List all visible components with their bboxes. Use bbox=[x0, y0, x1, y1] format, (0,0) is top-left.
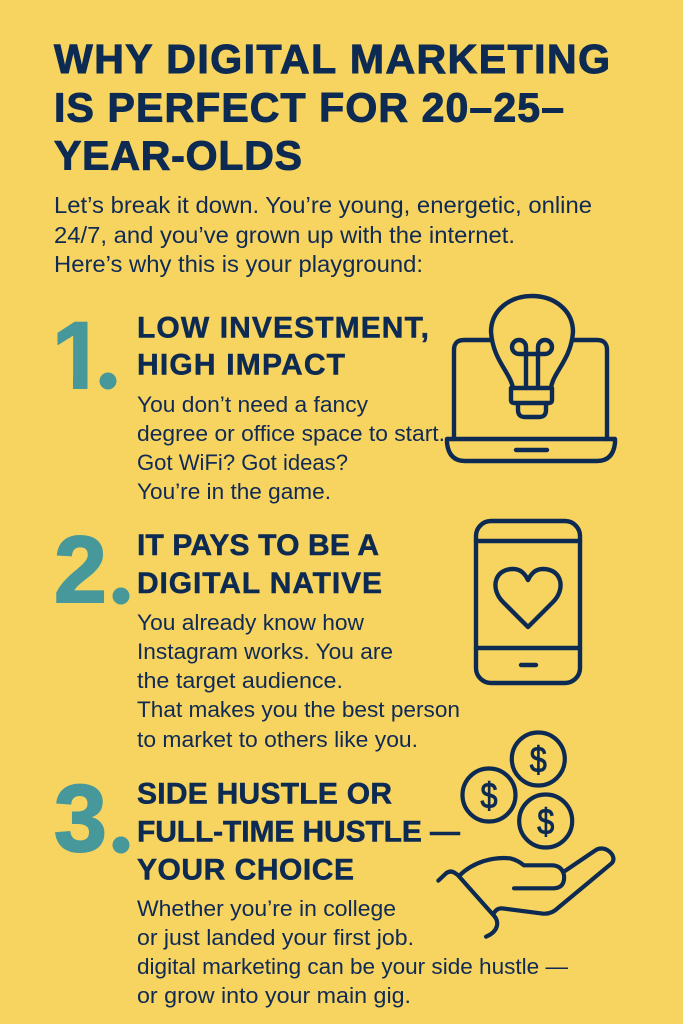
icon: hand with dollar coins: $ bbox=[530, 739, 547, 780]
intro text: 24/7, and you’ve grown up with the internet. bbox=[54, 222, 515, 248]
section 2 heading bbox=[137, 529, 382, 600]
section 3 body: Whether you’re in college bbox=[137, 896, 396, 921]
section 2 heading: DIGITAL NATIVE bbox=[137, 567, 382, 600]
section 2 body: You already know how bbox=[137, 610, 365, 635]
icon: smartphone with heart bbox=[476, 521, 580, 683]
section 1 heading: HIGH IMPACT bbox=[137, 348, 345, 382]
number 1: 1 bbox=[52, 303, 105, 409]
number 3 bbox=[54, 766, 130, 872]
icon: lightbulb over laptop bbox=[447, 296, 615, 461]
section 1 heading: LOW INVESTMENT, bbox=[137, 312, 429, 344]
section 3 body: digital marketing can be your side hustle — bbox=[137, 954, 568, 979]
section 1 body: Got WiFi? Got ideas? bbox=[137, 450, 348, 475]
section 1 body: degree or office space to start. bbox=[137, 421, 445, 446]
section 3 body bbox=[137, 896, 568, 1008]
section 3 heading: SIDE HUSTLE OR bbox=[137, 778, 392, 810]
section 3 heading bbox=[137, 778, 460, 886]
title bbox=[54, 36, 610, 178]
section 2 body bbox=[137, 610, 460, 752]
intro text: Let’s break it down. You’re young, energetic, online bbox=[54, 192, 592, 218]
section 2 body: That makes you the best person bbox=[137, 697, 460, 722]
icon: hand with dollar coins bbox=[438, 732, 613, 937]
number 2 bbox=[54, 517, 130, 623]
section 1 body: You don’t need a fancy bbox=[137, 392, 369, 417]
section 1 heading bbox=[137, 312, 429, 382]
section 3 heading: YOUR CHOICE bbox=[137, 854, 354, 886]
section 2 body: Instagram works. You are bbox=[137, 639, 393, 664]
icon: hand with dollar coins: $ bbox=[537, 801, 554, 842]
title: YEAR-OLDS bbox=[54, 132, 302, 178]
intro text bbox=[54, 192, 592, 277]
title: WHY DIGITAL MARKETING bbox=[54, 36, 610, 82]
section 3 body: or just landed your first job. bbox=[137, 925, 414, 950]
section 1 body: You’re in the game. bbox=[137, 479, 331, 504]
title: IS PERFECT FOR 20–25– bbox=[54, 84, 564, 130]
section 2 body: the target audience. bbox=[137, 668, 343, 693]
section 2 body: to market to others like you. bbox=[137, 727, 418, 752]
section 1 body bbox=[137, 392, 445, 504]
section 3 heading: FULL-TIME HUSTLE — bbox=[137, 816, 460, 848]
section 3 body: or grow into your main gig. bbox=[137, 983, 411, 1008]
number 1 bbox=[58, 322, 116, 390]
number 2: 2 bbox=[54, 517, 107, 623]
number 3: 3 bbox=[54, 766, 107, 872]
intro text: Here’s why this is your playground: bbox=[54, 251, 423, 277]
section 2 heading: IT PAYS TO BE A bbox=[137, 529, 379, 562]
icon: hand with dollar coins: $ bbox=[480, 775, 498, 816]
